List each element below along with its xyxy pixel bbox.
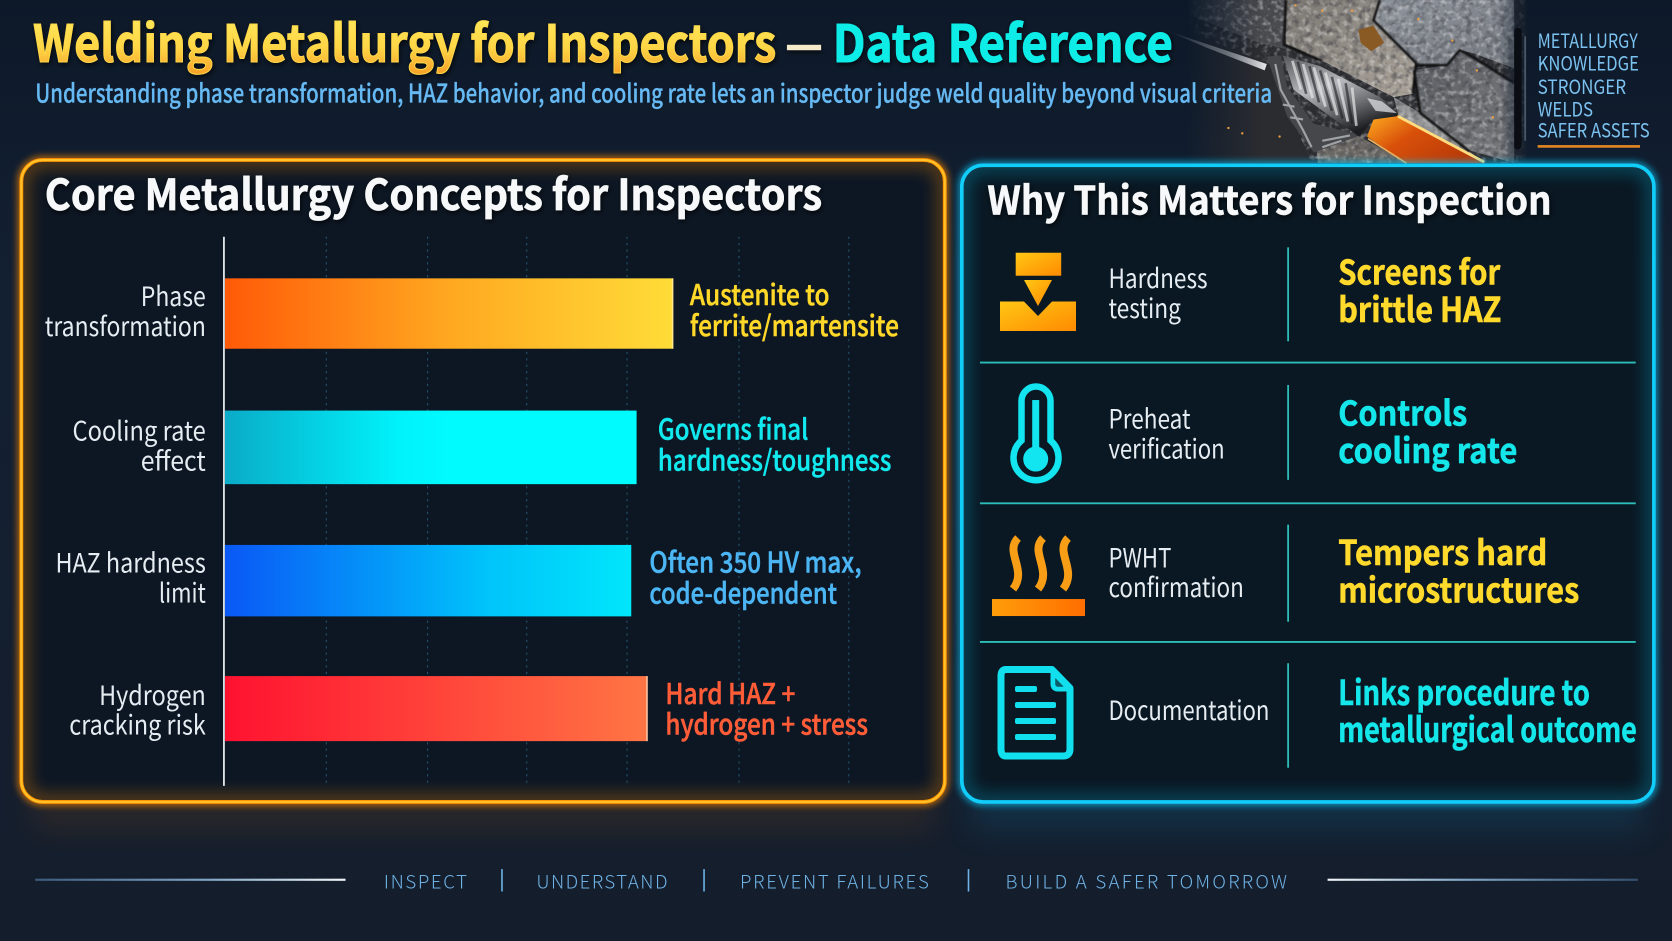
heading: core concepts: Core Metallurgy Concepts for Inspectors [45,162,822,223]
bar: phase transformation: Austenite to [690,273,830,314]
row: preheat verification: Preheat [1108,398,1191,437]
row: documentation: Documentation [1108,689,1269,728]
row: PWHT confirmation: Tempers hard [1338,525,1547,575]
bar: cooling rate effect: hardness/toughness [658,438,891,479]
sidebar tagline: KNOWLEDGE [1538,47,1639,76]
row: PWHT confirmation: PWHT [1108,536,1171,575]
bar chart [45,237,899,786]
panel: why this matters [962,165,1654,832]
row: preheat verification [1014,386,1517,480]
row: documentation: Links procedure to [1338,665,1590,715]
footer strip: PREVENT FAILURES [740,867,929,894]
title: Welding Metallurgy for Inspectors [33,3,776,77]
row: hardness testing: testing [1108,287,1181,326]
row: PWHT confirmation: confirmation [1108,566,1244,605]
row dividers [980,247,1636,768]
bar: hydrogen cracking risk: hydrogen + stress [665,703,868,744]
bar: cooling rate effect [73,407,891,484]
bar: HAZ hardness limit: code-dependent [649,572,837,613]
icon: thermometer [1014,387,1059,480]
bar: hydrogen cracking risk: cracking risk [69,704,206,743]
icon: hardness indenter [1000,253,1076,331]
bar: HAZ hardness limit: Often 350 HV max, [649,541,862,582]
row: preheat verification: verification [1108,428,1225,467]
row: preheat verification: Controls [1338,386,1467,436]
row: hardness testing: Hardness [1108,257,1208,296]
title: Data Reference [833,3,1173,77]
bar: phase transformation: Phase [141,275,206,314]
row: hardness testing: brittle HAZ [1338,282,1501,332]
bar: cooling rate effect: effect [141,439,206,478]
heading: why this matters: Why This Matters for Inspection [987,169,1552,226]
footer strip: BUILD A SAFER TOMORROW [1006,867,1287,894]
bar: phase transformation: transformation [45,305,206,344]
row: PWHT confirmation [992,525,1579,616]
sidebar tagline: STRONGER [1538,71,1626,100]
bar: cooling rate effect: Cooling rate [73,409,206,448]
bar: hydrogen cracking risk: Hard HAZ + [665,672,795,713]
bar: cooling rate effect: Governs final [658,407,808,448]
sidebar tagline: METALLURGY [1538,25,1638,54]
bar: hydrogen cracking risk [69,672,868,744]
bar: phase transformation: ferrite/martensite [690,304,899,345]
photo: weld bead on cracked metal [1174,0,1525,164]
bar: HAZ hardness limit [55,541,862,616]
row: hardness testing: Screens for [1338,245,1500,295]
icon: document [1001,668,1071,756]
row: preheat verification: cooling rate [1338,423,1517,473]
subtitle: Understanding phase transformation, HAZ behavior, and cooling rate lets an inspector judge weld quality beyond visual criteria [35,73,1272,110]
row: hardness testing [1000,245,1501,332]
bar: hydrogen cracking risk: Hydrogen [99,674,206,713]
sidebar tagline: SAFER ASSETS [1538,115,1650,144]
bar: HAZ hardness limit: limit [159,572,206,611]
footer strip [35,867,1638,894]
footer strip: INSPECT [384,867,467,894]
sidebar tagline [1514,25,1650,149]
footer strip: UNDERSTAND [536,867,668,894]
row: documentation [1001,665,1637,756]
bar: HAZ hardness limit: HAZ hardness [55,542,206,581]
sidebar tagline: WELDS [1538,93,1593,122]
bar: phase transformation [45,273,899,349]
row: PWHT confirmation: microstructures [1338,563,1579,613]
panel: core metallurgy concepts [21,160,945,832]
icon: heat plate [992,538,1085,616]
